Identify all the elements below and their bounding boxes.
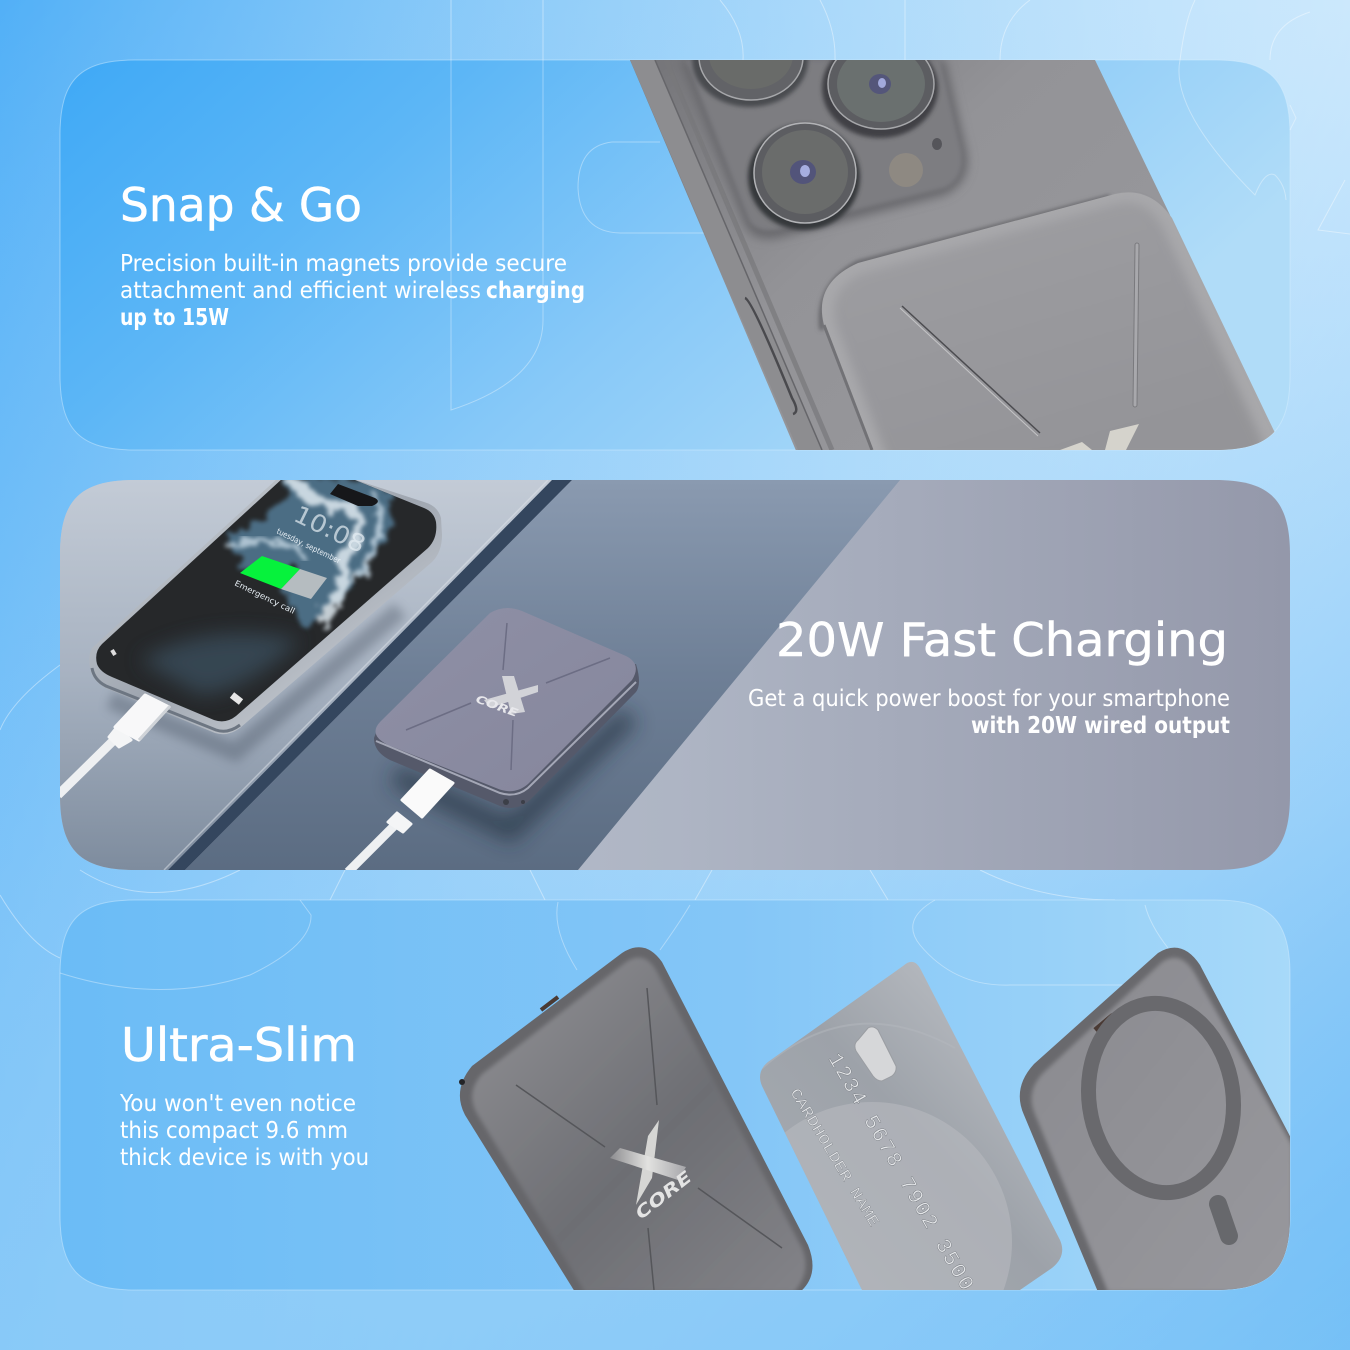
text block: Snap & Go description: Precision built-in magnets provide secure: [120, 251, 567, 277]
chart: battery level on phone screen: [240, 556, 327, 599]
icon: card chip: [855, 1027, 896, 1081]
logo: X CORE: CORE: [474, 693, 520, 720]
text block: Ultra-Slim description: this compact 9.6 mm: [120, 1118, 348, 1144]
text: cardholder name: CARDHOLDER NAME: [786, 1086, 882, 1230]
photo: desk background: [60, 480, 1290, 870]
text block: Snap & Go description: attachment and efficient wireless: [120, 278, 481, 304]
photo: smartphone charging: [58, 478, 442, 795]
photo: magnetic power bank: [821, 192, 1276, 460]
heading: 20W Fast Charging: 20W Fast Charging: [776, 613, 1228, 667]
logo: X CORE: [476, 676, 538, 716]
text: phone lock screen: Emergency call: [233, 579, 296, 616]
text: card number: 1234 5678 7902 3500: [822, 1050, 977, 1295]
text block: Ultra-Slim description: thick device is with you: [120, 1145, 369, 1171]
logo: X CORE on power bank: CORE: [632, 1167, 696, 1224]
panel: Ultra-Slim: [60, 900, 1290, 1290]
logo: X CORE on power bank: [610, 1120, 690, 1218]
text block: Ultra-Slim description: [119, 1091, 369, 1171]
text block: Snap & Go description: up to 15W: [120, 305, 229, 331]
icon: magnetic ring: [1076, 994, 1246, 1202]
icon: USB-C plug on phone: [58, 695, 170, 795]
text block: 20W description: [748, 686, 1230, 739]
photo: power bank on desk: [374, 608, 639, 830]
photo: phone back: [630, 60, 1170, 450]
text block: Ultra-Slim description: You won't even notice: [119, 1091, 356, 1117]
text: phone lock screen: tuesday, september: [275, 527, 343, 566]
text block: Snap & Go description: charging: [486, 278, 585, 304]
text: phone lock screen: 10:08: [289, 500, 370, 559]
photo: power bank back with magnetic ring: [1020, 948, 1292, 1292]
photo: power bank front: [459, 947, 812, 1292]
heading: Ultra-Slim: Ultra-Slim: [121, 1018, 357, 1072]
panel: 20W Fast Charging: [58, 478, 1290, 872]
heading: Snap & Go: Snap & Go: [120, 178, 362, 232]
photo: credit card: [760, 962, 1062, 1290]
text: phone lock screen: [234, 506, 365, 614]
icon: camera lens top right: [820, 60, 940, 140]
icon: camera lens top left: [690, 60, 810, 109]
icon: ring slot: [1218, 1204, 1229, 1236]
icon: USB-C plug on power bank: [348, 770, 453, 872]
text block: Snap & Go description: [120, 251, 585, 331]
icon: camera flash: [889, 153, 923, 187]
icon: camera lens bottom: [748, 123, 860, 230]
text block: 20W description: with 20W wired output: [971, 713, 1230, 739]
text block: 20W description: Get a quick power boost for your smartphone: [748, 686, 1230, 712]
panel: Snap & Go: [60, 60, 1296, 450]
